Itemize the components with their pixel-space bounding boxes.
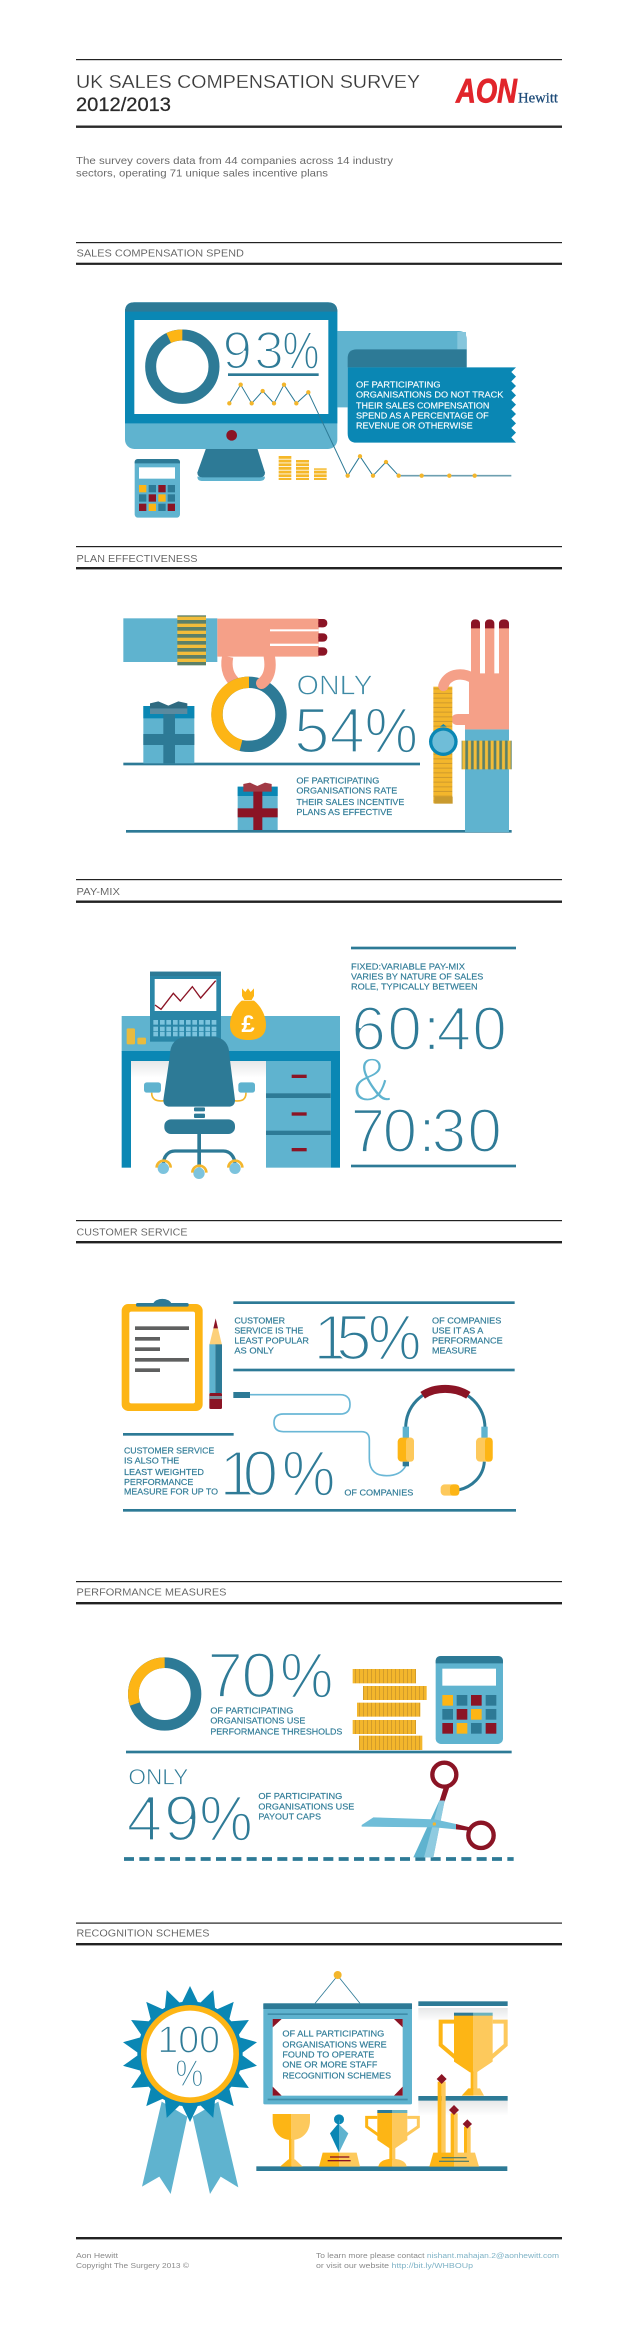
title: UK SALES COMPENSATION SURVEY (76, 71, 420, 92)
panel: pay-mix (122, 947, 516, 1179)
stat: 70% (207, 1640, 333, 1712)
donut chart: 93% (151, 335, 214, 398)
hanging frame with text (263, 1971, 412, 2104)
stat: 15% (313, 1302, 421, 1374)
section heading: recognition schemes: RECOGNITION SCHEMES (76, 1929, 210, 1940)
footer (76, 2237, 562, 2270)
text: performance thresholds (210, 1706, 343, 1737)
left hand holding donut (123, 615, 327, 683)
right hand holding watch (429, 619, 512, 832)
desk (122, 1016, 340, 1168)
stat: 60:40: 60:40 (351, 995, 507, 1064)
text: customer service least popular: LEAST POPULAR (234, 1336, 309, 1346)
text: performance thresholds: ORGANISATIONS USE (210, 1716, 306, 1726)
rosette with 100%: 100 (157, 2020, 220, 2062)
text: customer service least weighted: MEASURE FOR UP TO (124, 1487, 218, 1497)
text: of companies use it: OF COMPANIES (432, 1316, 502, 1326)
money bag: £ (241, 1011, 255, 1038)
text: of companies use it (432, 1316, 503, 1356)
stat: 10%: % (282, 1437, 335, 1509)
text: 54% description: PLANS AS EFFECTIVE (296, 807, 393, 817)
coin stacks (279, 456, 327, 480)
text: 54% description: OF PARTICIPATING (296, 776, 380, 786)
section heading: performance measures: PERFORMANCE MEASURES (76, 1588, 227, 1599)
banner: 93% description: REVENUE OR OTHERWISE (356, 421, 473, 431)
pencil icon (209, 1318, 222, 1409)
panel: plan effectiveness (123, 615, 512, 833)
panel: sales compensation spend (125, 302, 516, 518)
text: customer service least popular: SERVICE IS THE (234, 1326, 304, 1336)
panel: recognition schemes (121, 1971, 508, 2194)
stat: 49%: 9 (164, 1782, 200, 1854)
banner: 93% description (337, 331, 516, 443)
text: customer service least weighted: PERFORMANCE (124, 1477, 194, 1487)
trophy: goblet (273, 2114, 310, 2167)
stat: 15%: % (368, 1302, 421, 1374)
line chart (227, 382, 511, 478)
section heading: pay-mix: PAY-MIX (76, 887, 120, 898)
footer: credits: Aon Hewitt (76, 2251, 119, 2260)
text: 54% description: ORGANISATIONS RATE (296, 786, 398, 796)
gift: red ribbon (238, 783, 278, 831)
banner: 93% description: THEIR SALES COMPENSATION (356, 400, 489, 410)
intro text: sectors, operating 71 unique sales incentive plans (76, 169, 328, 180)
stat: 54%: % (365, 695, 418, 767)
text: payout caps: ORGANISATIONS USE (258, 1802, 355, 1812)
text: performance thresholds: PERFORMANCE THRESHOLDS (210, 1727, 343, 1737)
stat: 15%: 5 (336, 1302, 372, 1374)
footer: credits: Copyright The Surgery 2013 © (76, 2261, 189, 2270)
trophy: medium (367, 2110, 418, 2167)
text: customer service least weighted (124, 1446, 218, 1497)
text: pay-mix description: FIXED:VARIABLE PAY-MIX (351, 962, 465, 972)
stat: 15%: 1 (313, 1302, 349, 1374)
text: of companies use it: USE IT AS A (432, 1326, 484, 1336)
header panel (76, 59, 562, 180)
stat: 70%: % (280, 1640, 333, 1712)
icon: headset with cord (233, 1388, 493, 1496)
ampersand: & (352, 1046, 392, 1115)
text: performance thresholds: OF PARTICIPATING (210, 1706, 294, 1716)
section heading: plan effectiveness: PLAN EFFECTIVENESS (76, 554, 198, 565)
hanging frame with text: ORGANISATIONS WERE (282, 2040, 387, 2050)
footer: contact: To learn more please contact nishant.mahajan.2@aonhewitt.com (316, 2251, 559, 2260)
coin stacks (353, 1669, 427, 1750)
text: customer service least weighted: IS ALSO THE (124, 1456, 180, 1466)
banner: 93% description: SPEND AS A PERCENTAGE OF (356, 411, 489, 421)
footer: contact (316, 2251, 559, 2270)
text: customer service least weighted: CUSTOMER SERVICE (124, 1446, 215, 1456)
banner: 93% description: OF PARTICIPATING (356, 380, 441, 390)
icon: monitor stand (197, 448, 265, 481)
gift: blue ribbon (143, 701, 194, 763)
stat: 49%: % (199, 1782, 253, 1854)
rosette with 100% (121, 1986, 259, 2194)
stat: 70:30: 70:30 (351, 1097, 502, 1166)
text: customer service least popular: AS ONLY (234, 1346, 274, 1356)
text: of companies use it: MEASURE (432, 1346, 477, 1356)
donut chart: 54% (217, 682, 281, 746)
text: pay-mix description: ROLE, TYPICALLY BETWEEN (351, 982, 478, 992)
stat: 93% (223, 321, 319, 380)
icon: monitor (125, 302, 337, 449)
footer: contact: or visit our website http://bit.ly/WHBOUp (316, 2261, 473, 2270)
text: customer service least popular: CUSTOMER (234, 1316, 285, 1326)
trophy: figure on plinth (319, 2114, 360, 2167)
calculator icon (135, 459, 180, 518)
hanging frame with text: FOUND TO OPERATE (282, 2050, 375, 2060)
calculator icon (436, 1656, 503, 1744)
logo: Aon Hewitt: Hewitt (518, 91, 558, 107)
stat: 70%: 0 (241, 1640, 277, 1712)
laptop with chart (150, 972, 221, 1042)
stat: 54%: 4 (329, 695, 365, 767)
panel: performance measures (124, 1640, 514, 1859)
logo: Aon Hewitt: AON (455, 73, 518, 111)
stat: 93%: % (283, 321, 319, 380)
stat: 49%: 4 (127, 1782, 162, 1854)
donut chart: 70% (133, 1663, 196, 1725)
stat: 54%: 5 (294, 695, 330, 767)
intro text (76, 156, 394, 180)
text: customer service least weighted: LEAST WEIGHTED (124, 1467, 204, 1477)
rosette with 100%: % (175, 2053, 203, 2095)
hanging frame with text: OF ALL PARTICIPATING (282, 2029, 385, 2039)
money bag (230, 988, 266, 1040)
hanging frame with text: RECOGNITION SCHEMES (282, 2071, 391, 2081)
stat: 10%: 1 (219, 1437, 255, 1509)
year: 2012/2013 (76, 95, 171, 116)
text: pay-mix description (351, 962, 484, 992)
stat: 49% (127, 1782, 253, 1854)
stat: 93%: 3 (254, 321, 284, 380)
text: of companies: OF COMPANIES (344, 1488, 414, 1498)
stat: only: ONLY (297, 669, 373, 700)
footer: credits (76, 2251, 189, 2270)
trophy: spires (429, 2074, 479, 2167)
stat: 10%: 0 (243, 1437, 278, 1509)
text: 54% description: THEIR SALES INCENTIVE (296, 797, 405, 807)
text: payout caps (258, 1791, 355, 1822)
text: customer service least popular (234, 1316, 309, 1356)
shelves (256, 2001, 508, 2171)
small coins on desk (127, 1028, 146, 1044)
intro text: The survey covers data from 44 companies across 14 industry (76, 156, 394, 167)
stat: 54% (294, 695, 418, 767)
office chair (144, 1037, 255, 1179)
dashed cut line (124, 1853, 514, 1864)
clipboard icon (122, 1299, 203, 1411)
panel: customer service (122, 1299, 516, 1512)
text: pay-mix description: VARIES BY NATURE OF SALES (351, 972, 484, 982)
stat: only: ONLY (128, 1764, 189, 1789)
stat: 93%: 9 (223, 321, 252, 380)
section heading: sales compensation spend: SALES COMPENSATION SPEND (76, 249, 244, 260)
icon: scissors (362, 1763, 494, 1857)
trophy: large (441, 2013, 506, 2096)
text: payout caps: PAYOUT CAPS (258, 1812, 321, 1822)
watch (429, 687, 458, 804)
section heading: customer service: CUSTOMER SERVICE (76, 1228, 188, 1239)
fingertip over donut (262, 657, 270, 683)
banner: 93% description: ORGANISATIONS DO NOT TRACK (356, 390, 504, 400)
text: of companies use it: PERFORMANCE (432, 1336, 503, 1346)
hanging frame with text: ONE OR MORE STAFF (282, 2060, 377, 2070)
stat: 70%: 7 (207, 1640, 243, 1712)
stat: 10% (219, 1437, 335, 1509)
text: payout caps: OF PARTICIPATING (258, 1791, 343, 1801)
text: 54% description (296, 776, 405, 817)
